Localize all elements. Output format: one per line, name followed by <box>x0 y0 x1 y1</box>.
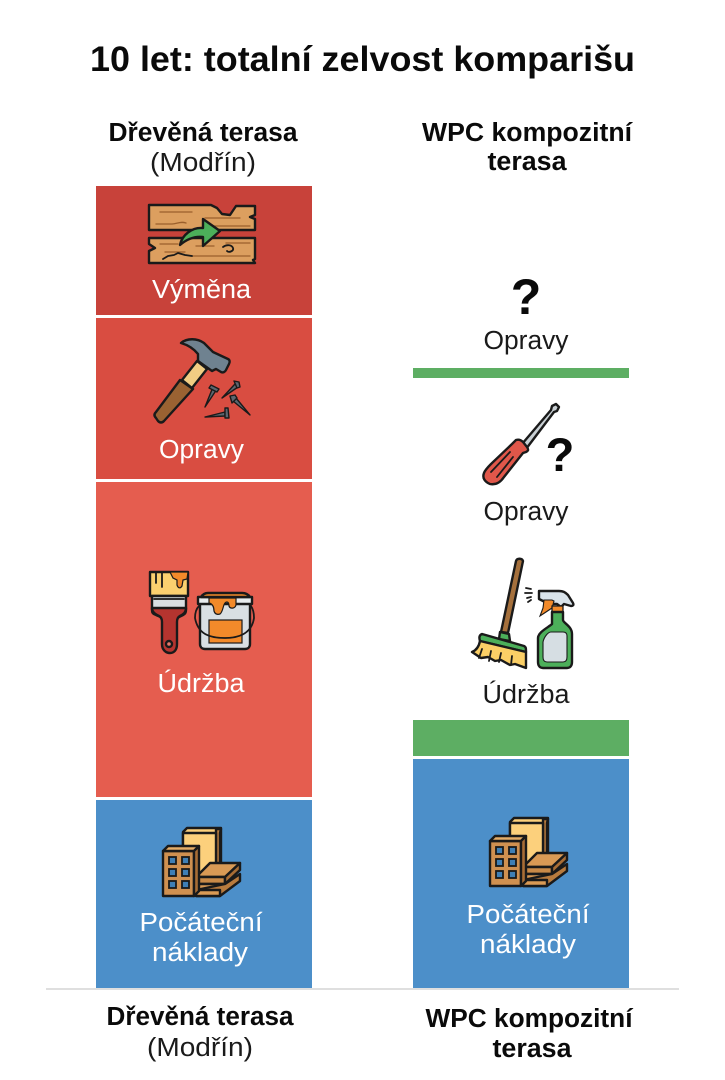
heading: wood terrace column <box>108 119 298 177</box>
heading: wood terrace column: (Modřín) <box>150 149 256 177</box>
title: 10 let: totalní zelvost komparišu <box>90 40 635 79</box>
panel: WPC initial costs segment <box>413 759 629 988</box>
heading: WPC terrace column: terasa <box>488 148 567 176</box>
heading: WPC terrace column: WPC kompozitní <box>422 119 633 147</box>
label: Údržba <box>158 669 245 698</box>
panel: wood initial costs segment <box>96 800 312 988</box>
icon: paint brush and bucket <box>150 572 254 653</box>
axis label: wood terrace: (Modřín) <box>147 1034 253 1062</box>
label: Opravy <box>159 436 244 464</box>
axis label: WPC terrace: WPC kompozitní <box>426 1005 633 1033</box>
label: Opravy <box>484 498 569 526</box>
label: Počáteční <box>466 901 590 929</box>
panel: WPC top question segment <box>484 269 569 355</box>
label: Výměna <box>152 276 252 304</box>
panel: wood maintenance segment <box>96 482 312 797</box>
axis label: WPC terrace: terasa <box>492 1035 572 1063</box>
heading: wood terrace column: Dřevěná terasa <box>108 119 298 147</box>
panel: WPC maintenance <box>472 559 573 709</box>
axis label: WPC terrace <box>426 1005 633 1063</box>
bar: WPC thin green segment <box>413 368 629 378</box>
icon: building materials <box>490 818 567 886</box>
heading: WPC terrace column <box>422 119 633 176</box>
icon: question mark: ? <box>511 269 541 325</box>
panel: wood repairs segment <box>96 318 312 479</box>
label: náklady <box>152 939 248 967</box>
axis label: wood terrace <box>106 1003 294 1062</box>
axis label: wood terrace: Dřevěná terasa <box>106 1003 294 1031</box>
icon: screwdriver with question mark: ? <box>546 428 574 481</box>
icon: planks with arrow <box>149 205 255 263</box>
bar: WPC thick green segment <box>413 720 629 756</box>
panel: WPC repairs <box>483 404 574 526</box>
icon: hammer and nails <box>154 339 250 422</box>
label <box>466 901 590 959</box>
label <box>140 909 262 967</box>
label: Údržba <box>482 680 570 709</box>
label: Opravy <box>484 327 569 355</box>
panel: wood replacement segment <box>96 186 312 315</box>
label: náklady <box>480 931 576 959</box>
icon: building materials <box>163 828 240 896</box>
icon: broom and spray bottle <box>472 559 573 668</box>
label: Počáteční <box>140 909 262 937</box>
